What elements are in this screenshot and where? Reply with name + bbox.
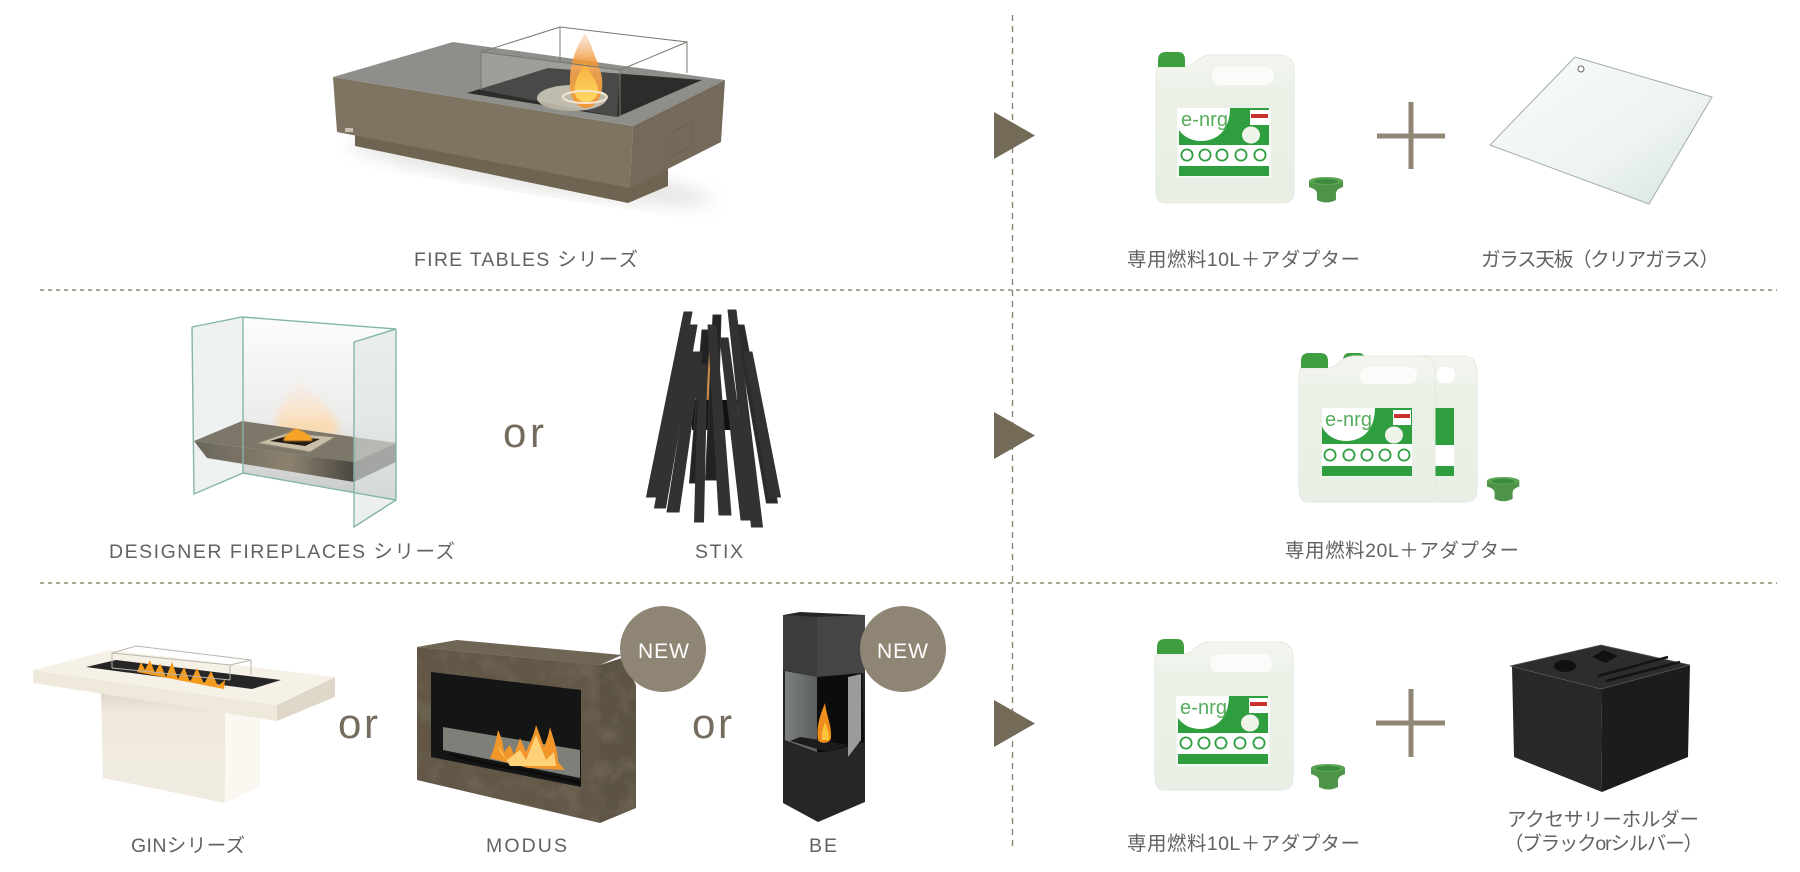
icon: adapter [1311,764,1345,790]
product image: designer fireplace [192,317,396,527]
icon: adapter [1309,177,1343,202]
product image: fuel jug 10L [1156,52,1294,203]
label: FIRE TABLES series: FIRE TABLES シリーズ [414,249,638,271]
arrow: row 3 [994,700,1035,747]
product image: MODUS [417,640,636,823]
product image: rear fuel jug [1341,353,1477,502]
arrow: row 1 [994,112,1035,159]
divider: vertical dashed line [1012,15,1014,850]
product image: accessory holder [1510,645,1690,792]
badge: NEW [860,606,946,692]
product image: front fuel jug: e-nrg [1325,409,1372,431]
badge: NEW [620,606,706,692]
text: or: or [338,700,378,747]
divider: first horizontal dashed line [40,289,1777,291]
product image: fuel jug 10L [1155,639,1293,790]
label: GIN series: GINシリーズ [131,835,245,857]
icon: plus sign [1377,102,1445,169]
text: or: or [503,409,544,456]
icon: adapter [1487,477,1519,501]
product image: glass top [1490,57,1712,204]
badge: NEW: NEW [638,640,689,663]
panel: row 2 accessories [1285,353,1519,562]
label: accessory holder [1504,809,1703,855]
panel: row 3 accessories [1127,639,1703,855]
product image: fuel jug 10L: e-nrg [1180,697,1227,719]
label: fuel 10L and adapter: 専用燃料10L＋アダプター [1127,833,1360,855]
label: accessory holder: アクセサリーホルダー [1507,809,1699,831]
label: STIX: STIX [695,541,743,563]
badge: NEW: NEW [877,640,928,663]
label: BE: BE [809,835,837,857]
arrow: row 2 [994,412,1035,459]
panel: row 2 products [109,310,780,563]
product image: BE [783,612,865,822]
panel: row 3 products [33,606,946,857]
label: DESIGNER FIREPLACES series: DESIGNER FIREPLACES シリーズ [109,541,455,563]
panel: row 1 products [333,27,725,271]
label: MODUS: MODUS [486,835,567,857]
product image: front fuel jug [1299,353,1435,502]
panel: row 1 accessories [1127,52,1719,271]
product image: STIX [646,310,780,527]
label: accessory holder: （ブラックorシルバー） [1504,832,1703,855]
text: or: or [692,700,732,747]
icon: plus sign [1376,689,1445,757]
label: fuel 10L and adapter: 専用燃料10L＋アダプター [1127,249,1360,271]
label: fuel 20L and adapter: 専用燃料20L＋アダプター [1285,540,1519,562]
product image: fuel jug 10L: e-nrg [1181,109,1228,131]
divider: second horizontal dashed line [40,582,1777,584]
product image: fire table [333,27,725,219]
label: glass top: ガラス天板（クリアガラス） [1481,249,1719,271]
product image: GIN table [33,646,335,803]
